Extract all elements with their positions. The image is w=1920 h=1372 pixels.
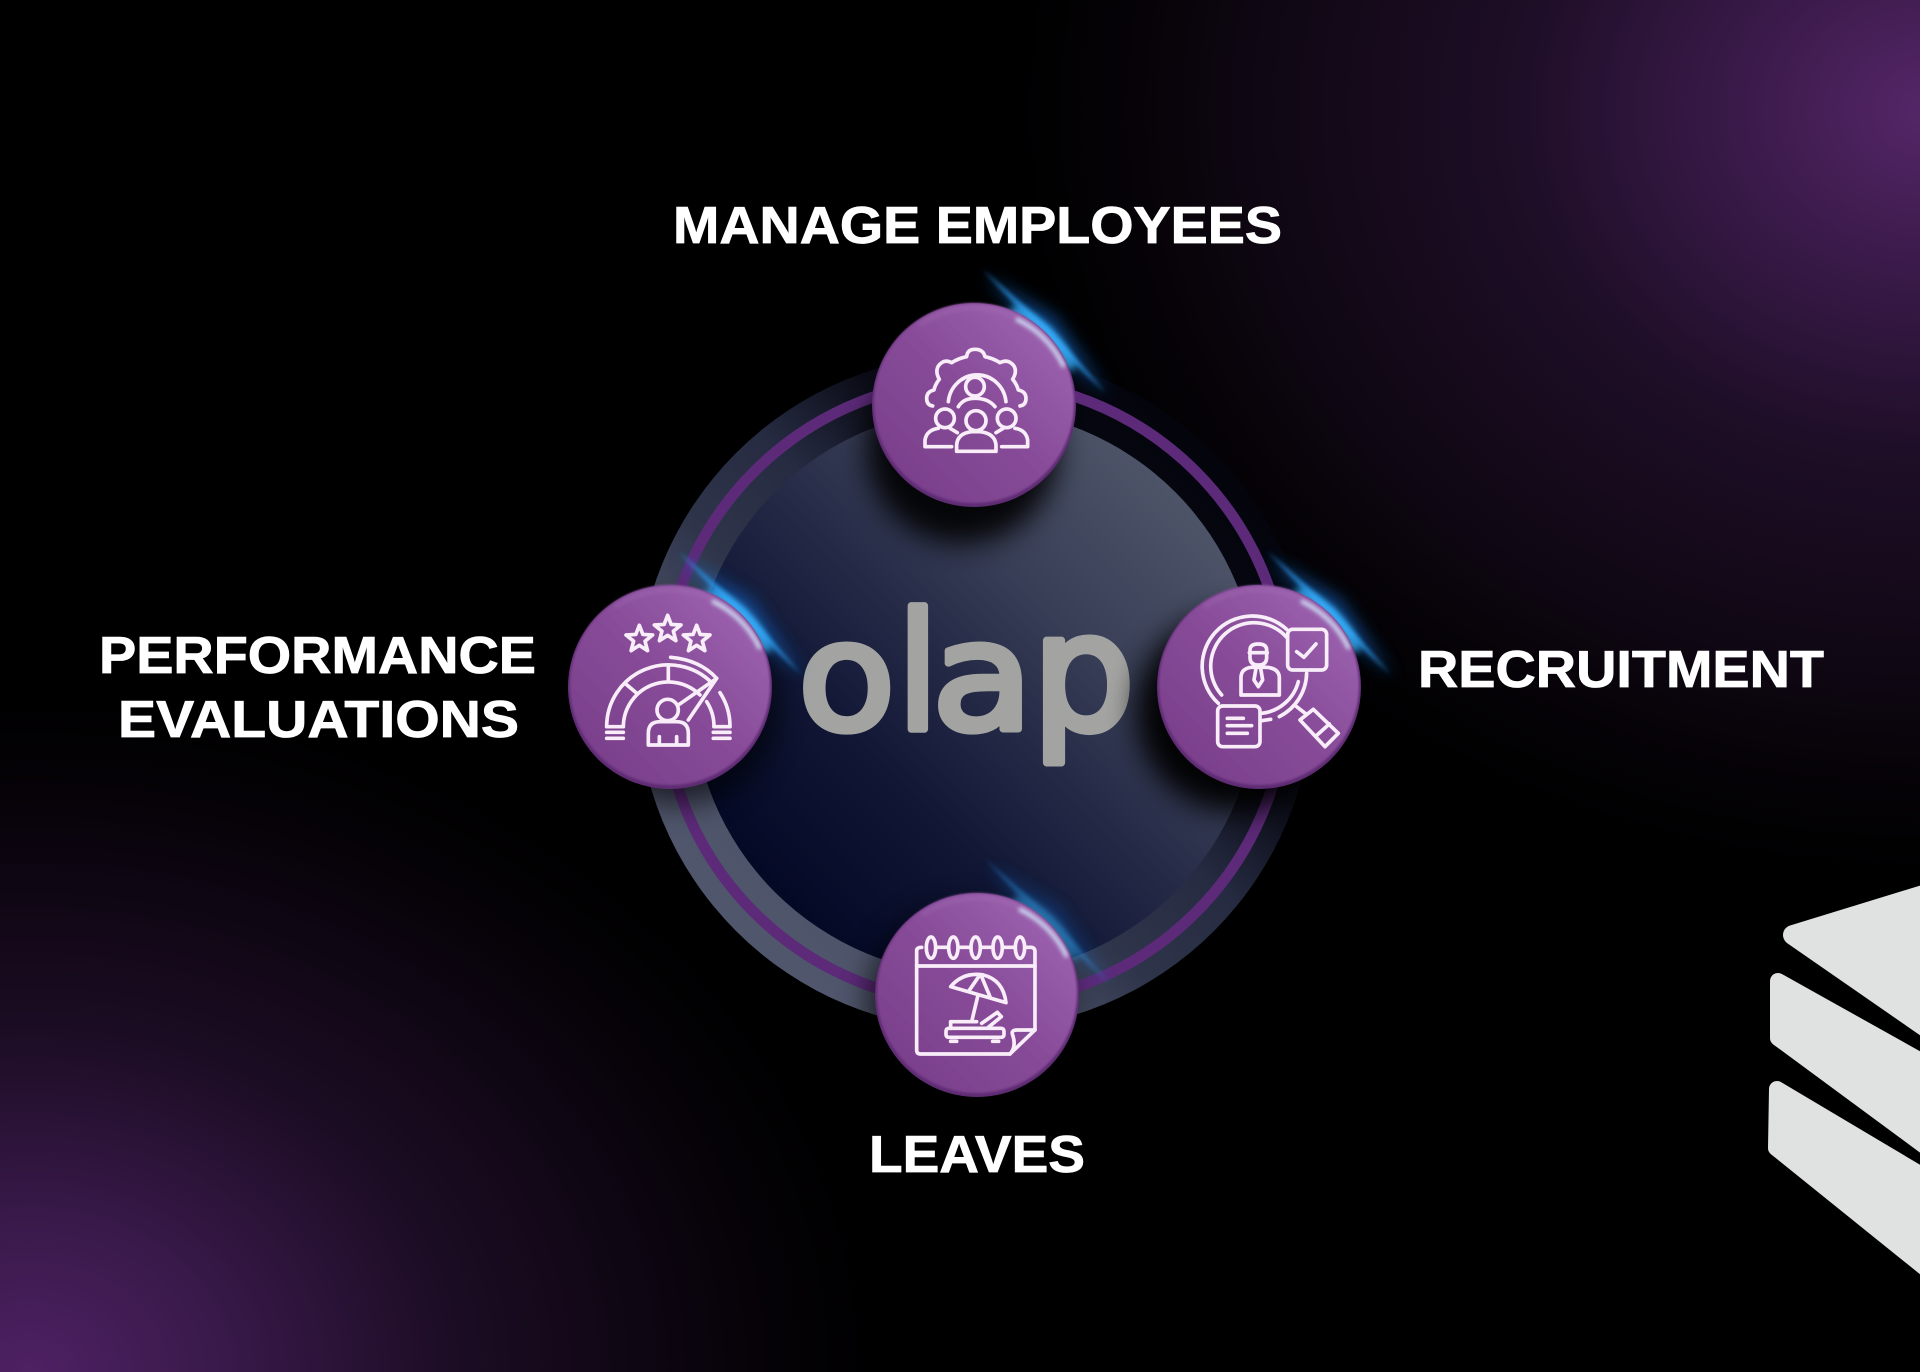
- label: leaves: LEAVES: [869, 1126, 1085, 1184]
- icon: gauge and stars: [607, 615, 730, 745]
- logo: o: [798, 591, 895, 765]
- label: performance evaluations: EVALUATIONS: [118, 691, 519, 749]
- node: leaves: [866, 859, 1112, 1107]
- label: recruitment: RECRUITMENT: [1418, 641, 1824, 699]
- node: performance evaluations: [568, 551, 805, 805]
- outer ring: [637, 354, 1313, 1030]
- icon: magnifier with candidate: [1202, 616, 1338, 747]
- brand shape: white stacked bands at lower right: [1776, 893, 1920, 1272]
- label: performance evaluations: [99, 627, 536, 749]
- hub diagram: [568, 269, 1394, 1107]
- node: manage employees: [866, 269, 1109, 544]
- logo: l: [897, 579, 939, 767]
- inner disc: [692, 409, 1258, 975]
- node: recruitment: [1136, 551, 1394, 812]
- label: performance evaluations: PERFORMANCE: [99, 627, 536, 685]
- label: manage employees: MANAGE EMPLOYEES: [673, 197, 1282, 255]
- purple ring: [663, 380, 1287, 1004]
- icon: calendar with beach lounger: [917, 937, 1035, 1054]
- logo: [798, 579, 1135, 768]
- logo: a: [932, 591, 1033, 765]
- icon: gear and team: [925, 349, 1028, 451]
- logo: p: [1032, 580, 1135, 768]
